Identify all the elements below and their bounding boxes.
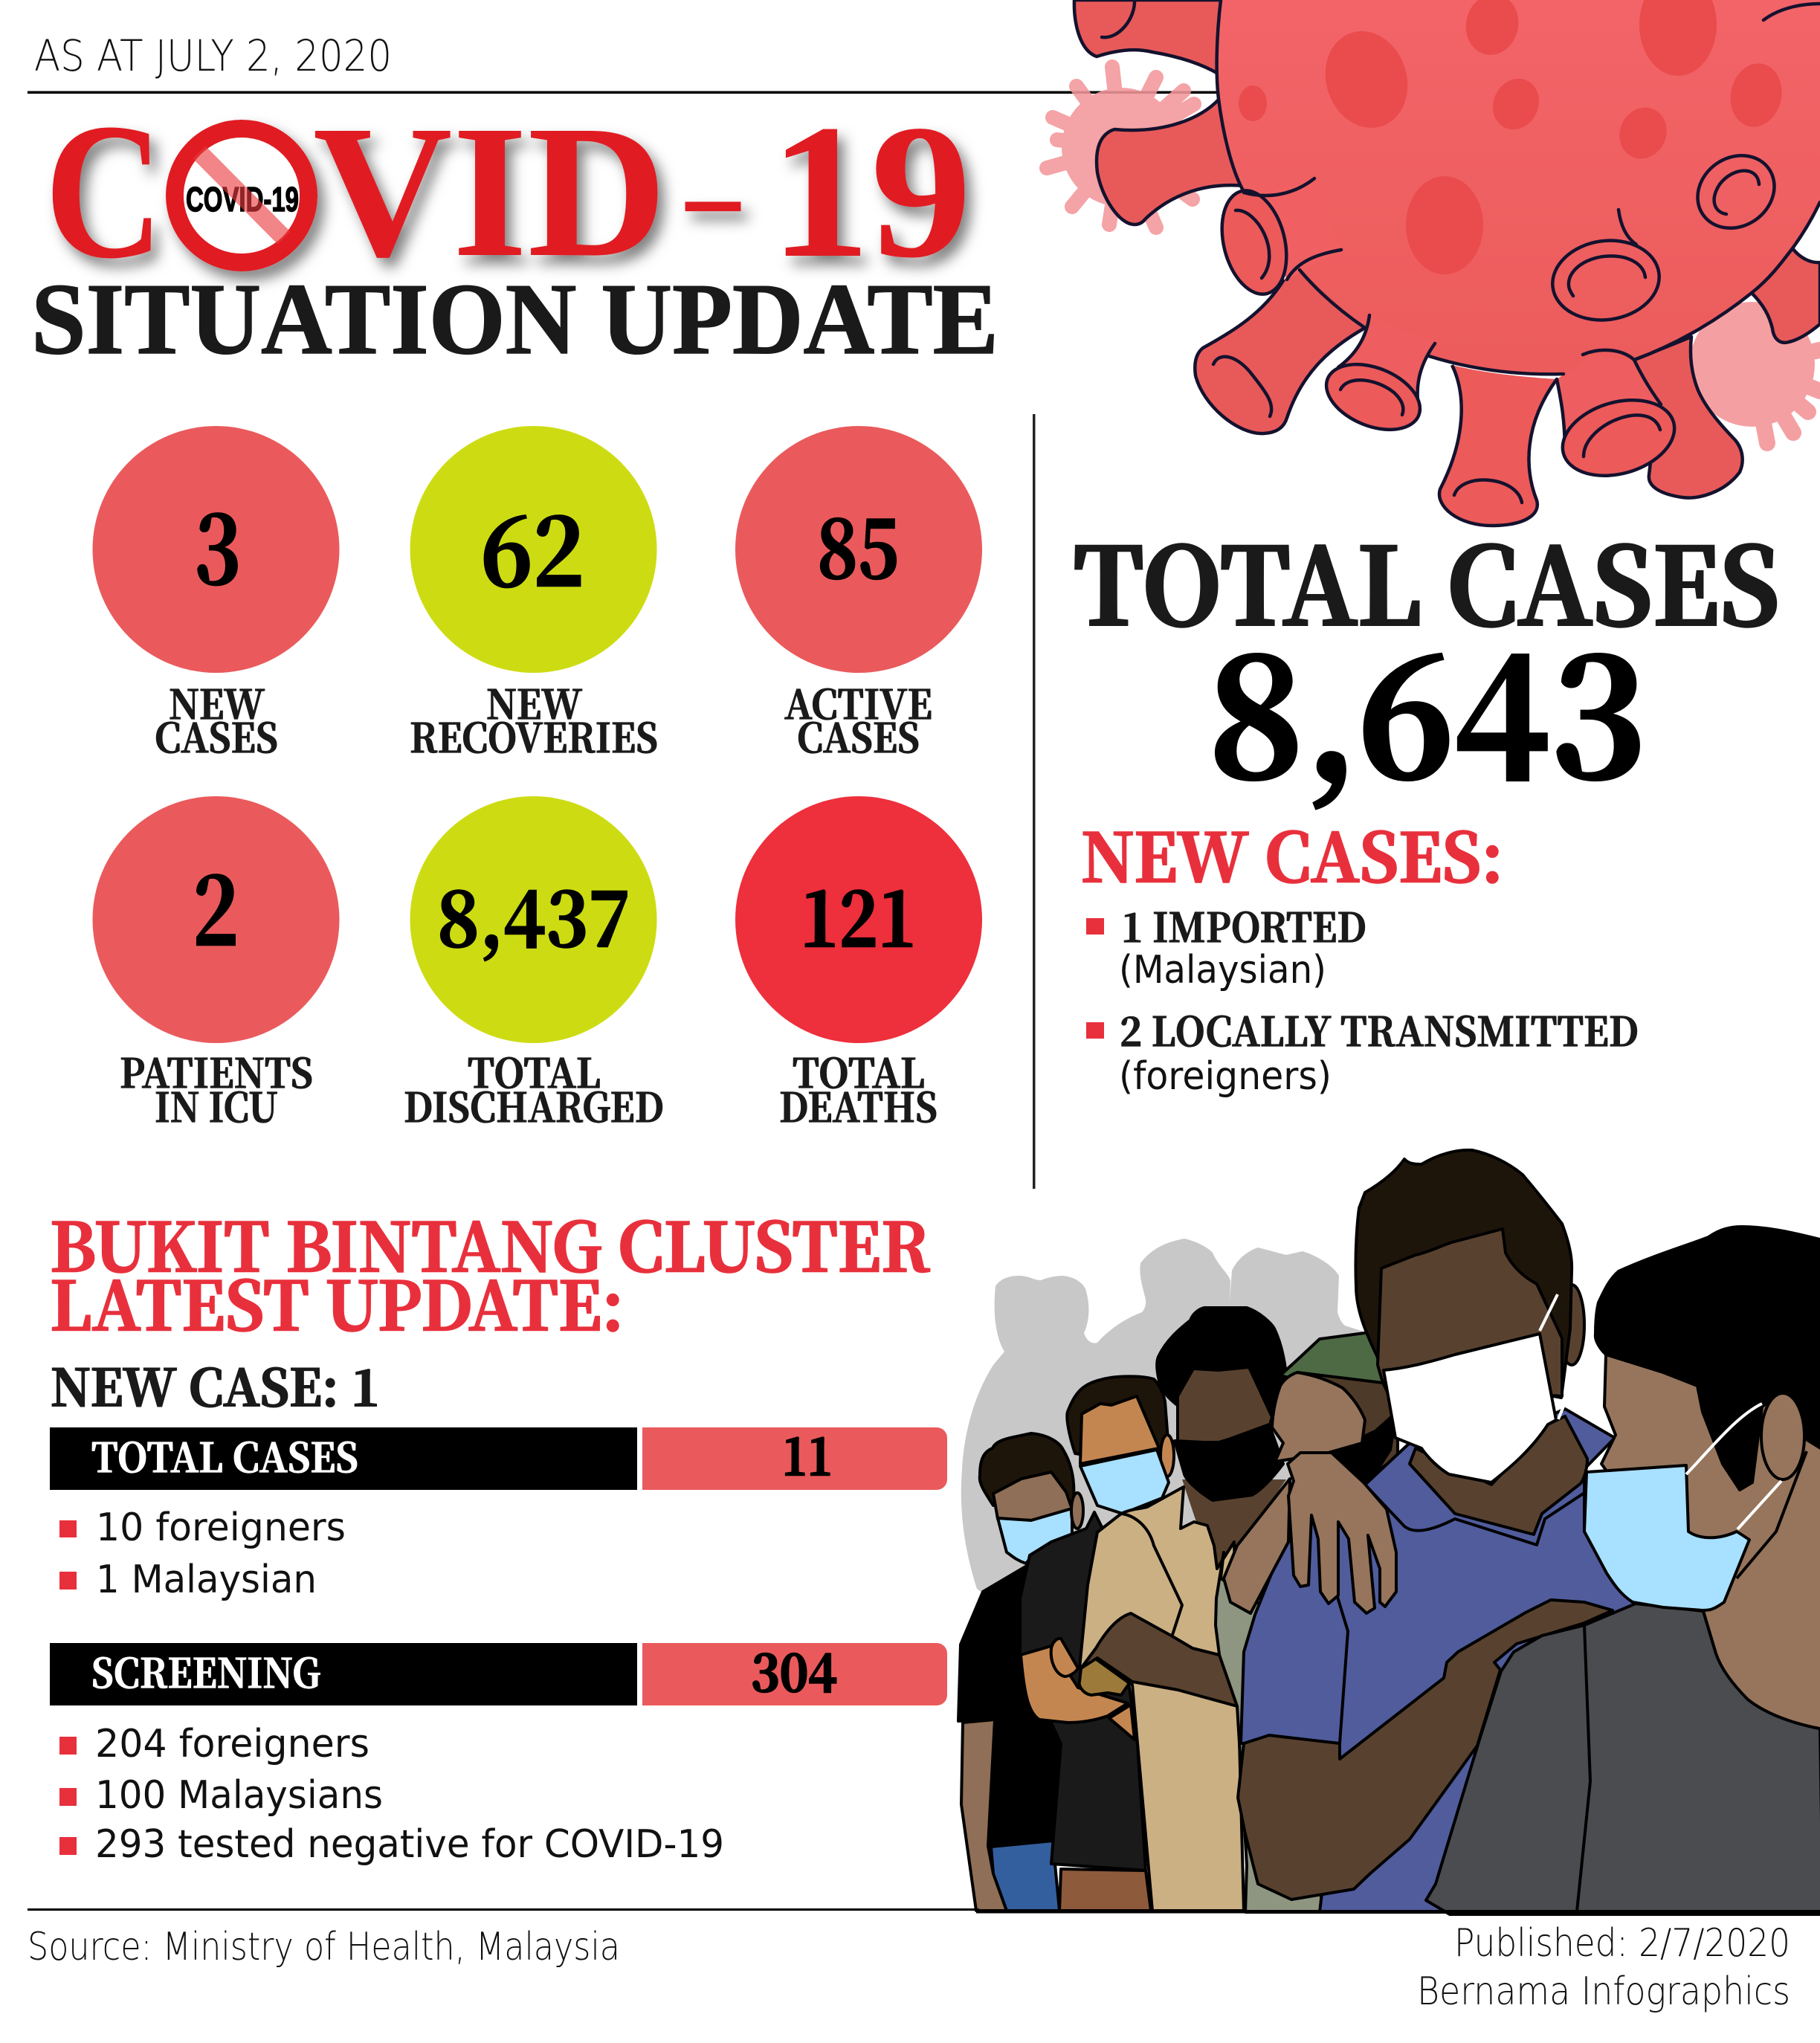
bullet: imported: (Malaysian) <box>1119 948 1326 993</box>
virus spots <box>1239 0 1787 274</box>
stat: new recoveries: 62 <box>481 475 584 614</box>
faded virus left <box>1047 67 1194 227</box>
surface ring 1 <box>1683 141 1789 243</box>
bar: screening: 304 <box>751 1632 837 1707</box>
title: COVID-19: 19 <box>769 85 972 297</box>
spike right edge <box>1752 248 1820 343</box>
stat: new recoveries: RECOVERIES <box>410 707 658 764</box>
bullet: imported <box>1086 897 1366 993</box>
stat: total discharged <box>404 796 664 1134</box>
list: screening breakdown <box>59 1722 724 1867</box>
total cases heading: TOTAL CASES <box>1074 503 1780 655</box>
stat: total deaths: DEATHS <box>779 1077 938 1134</box>
total cases number: 8,643 <box>1208 584 1646 825</box>
stat: patients in icu: 2 <box>193 834 239 973</box>
stat: total discharged: 8,437 <box>437 857 630 969</box>
green cap and draped mask <box>1272 1332 1398 1487</box>
vertical divider <box>1033 414 1035 1189</box>
stat: new cases: CASES <box>155 707 278 764</box>
stat: active cases <box>735 426 982 764</box>
virus body <box>1217 0 1820 374</box>
cluster heading <box>50 1194 930 1349</box>
panel: total cases <box>1074 503 1780 1099</box>
big man forearm <box>1238 1600 1613 1900</box>
tan shirt <box>1080 1487 1244 1911</box>
stat: active cases: 85 <box>817 484 899 601</box>
bullet: imported: 1 IMPORTED <box>1121 897 1366 954</box>
date line: AS AT JULY 2, 2020 <box>34 30 392 81</box>
panel: stat circles <box>92 426 982 1134</box>
list: screening breakdown: 293 tested negative for COVID-19 <box>95 1822 724 1867</box>
spike D <box>1557 355 1661 454</box>
hugging arm with orange skin <box>1021 1639 1135 1740</box>
stat: new recoveries <box>410 426 658 764</box>
stat: new recoveries: NEW <box>486 674 582 731</box>
person 3 head <box>1157 1308 1286 1572</box>
cluster heading: BUKIT BINTANG CLUSTER <box>50 1194 930 1291</box>
bar: total cases <box>50 1416 947 1491</box>
spike C <box>1439 365 1557 526</box>
bar: screening <box>50 1632 947 1707</box>
bar: total cases: TOTAL CASES <box>91 1427 358 1484</box>
title: COVID-19 <box>45 83 972 299</box>
big man head <box>1355 1150 1584 1482</box>
big man neck <box>1337 1416 1587 1743</box>
stat: new cases: 3 <box>194 473 241 612</box>
stat: total deaths: TOTAL <box>793 1042 925 1100</box>
list: screening breakdown: 100 Malaysians <box>95 1773 383 1818</box>
stat: patients in icu <box>92 796 339 1134</box>
spike lower left <box>1195 270 1365 433</box>
list: total cases breakdown <box>59 1505 346 1602</box>
panel: bukit bintang cluster <box>50 1194 947 1867</box>
blue shirt <box>1241 1409 1665 1912</box>
stat: new cases: NEW <box>169 674 265 731</box>
spike behind right <box>1634 337 1743 498</box>
title: COVID-19: - <box>677 134 749 257</box>
stat: total deaths: 121 <box>800 857 917 969</box>
stat: patients in icu: PATIENTS <box>120 1042 313 1100</box>
list: screening breakdown: 204 foreigners <box>95 1722 370 1766</box>
illustration: masked people <box>958 1150 1820 1914</box>
draped arm and hand <box>1224 1453 1396 1613</box>
stat: total deaths <box>735 796 982 1134</box>
background silhouettes <box>961 1239 1413 1636</box>
title letter C: C <box>45 83 164 299</box>
person 1 <box>958 1433 1085 1911</box>
stat: total discharged: DISCHARGED <box>404 1077 664 1134</box>
stat: active cases: ACTIVE <box>784 674 932 731</box>
list: total cases breakdown: 1 Malaysian <box>96 1558 317 1602</box>
footer rule <box>28 1908 1820 1914</box>
faded virus right <box>1690 302 1820 443</box>
new cases heading: NEW CASES: <box>1081 804 1503 901</box>
subtitle: SITUATION UPDATE <box>31 262 998 375</box>
spike mid left <box>1097 99 1264 225</box>
person 2 <box>1020 1376 1174 1911</box>
stat: active cases: CASES <box>797 707 920 764</box>
stat: patients in icu: IN ICU <box>155 1077 278 1134</box>
right man grey shirt <box>1426 1604 1820 1914</box>
crossed-out badge <box>184 138 300 254</box>
new case count: NEW CASE: 1 <box>51 1349 380 1421</box>
illustration: coronavirus <box>1047 0 1820 526</box>
crossed-out badge: COVID-19 <box>186 180 299 219</box>
virus outline <box>1217 0 1820 374</box>
spike J cap <box>1244 178 1341 280</box>
bar: screening: SCREENING <box>91 1642 320 1700</box>
grey-green shirt <box>1216 1552 1323 1912</box>
surface ring 2 <box>1547 233 1665 327</box>
right man head <box>1584 1227 1820 1729</box>
cluster heading: LATEST UPDATE: <box>50 1253 624 1349</box>
bar: total cases: 11 <box>782 1416 833 1491</box>
bullet: locally transmitted <box>1086 1001 1639 1099</box>
hugging arm with dark skin <box>1080 1613 1237 1706</box>
title: COVID-19: VID <box>313 87 667 297</box>
header rule <box>28 91 1219 94</box>
bullet: locally transmitted: (foreigners) <box>1119 1054 1332 1099</box>
list: total cases breakdown: 10 foreigners <box>96 1505 346 1550</box>
stat: new cases <box>92 426 339 764</box>
source text: Source: Ministry of Health, Malaysia <box>28 1925 620 1969</box>
spike top left <box>1074 0 1234 74</box>
spike B <box>1338 315 1435 401</box>
bullet: locally transmitted: 2 LOCALLY TRANSMITTED <box>1120 1001 1639 1058</box>
stat: total discharged: TOTAL <box>468 1042 601 1100</box>
